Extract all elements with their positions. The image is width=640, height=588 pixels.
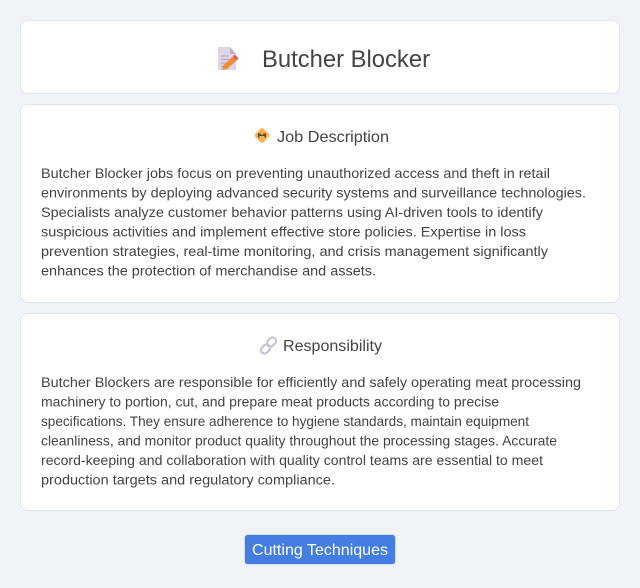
text block: job description — [41, 165, 586, 278]
text block: job description: suspicious activities and implement effective store policies. Expertise in loss — [41, 224, 526, 240]
text block: responsibility: Butcher Blockers are responsible for efficiently and safely operating meat processing — [41, 374, 581, 390]
panel: title card — [20, 20, 620, 94]
text block: responsibility: machinery to portion, cut, and prepare meat products according to precise — [41, 394, 499, 410]
heading: responsibility: Responsibility — [283, 338, 382, 355]
text block: job description: enhances the protection of merchandise and assets. — [41, 262, 376, 278]
text block: job description: Specialists analyze customer behavior patterns using AI-driven tools to identify — [41, 204, 543, 220]
button: cutting techniques: Cutting Techniques — [252, 542, 388, 559]
text block: responsibility: production targets and regulatory compliance. — [41, 472, 335, 488]
panel: responsibility card — [20, 313, 620, 511]
text block: job description: prevention strategies, real-time monitoring, and crisis management significantly — [41, 243, 548, 259]
icon: document with pencil — [218, 47, 238, 70]
heading: job description: Job Description — [277, 129, 389, 146]
text block: responsibility: cleanliness, and monitor product quality throughout the processing stages. Accurate — [41, 432, 557, 448]
text block: job description: Butcher Blocker jobs focus on preventing unauthorized access and theft in retail — [41, 165, 550, 181]
button: cutting techniques — [244, 534, 396, 564]
text block: responsibility: record-keeping and collaboration with quality control teams are essential to meet — [41, 452, 543, 468]
icon: diamond sign — [254, 127, 270, 144]
title: Butcher Blocker — [262, 46, 430, 73]
text block: responsibility — [41, 374, 581, 488]
text block: job description: environments by deploying advanced security systems and surveillance technologies. — [41, 184, 586, 200]
icon: chain link — [259, 336, 278, 355]
text block: responsibility: specifications. They ensure adherence to hygiene standards, maintain equipment — [41, 413, 529, 429]
panel: job description card — [20, 104, 620, 303]
